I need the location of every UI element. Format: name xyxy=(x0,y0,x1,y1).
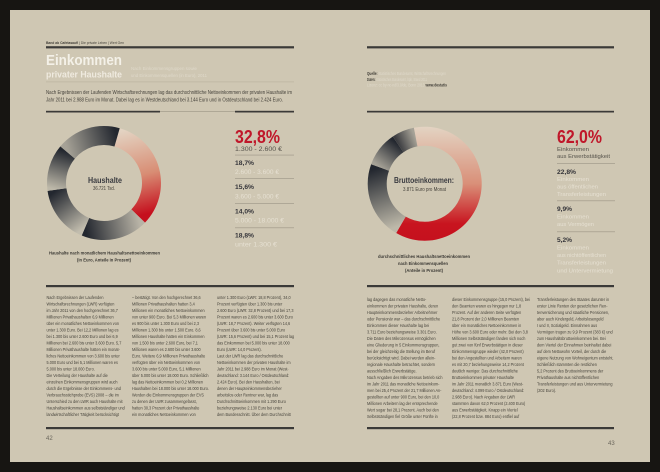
body text column 2: Millionen ein monatliches Nettoeinkommen xyxy=(132,308,205,313)
donut caption: (Anteile in Prozent) xyxy=(405,268,443,273)
segment 14,0% xyxy=(47,146,75,191)
body text column 6: Transferleistungen des Staates darunter in xyxy=(537,297,610,302)
body text column 6 xyxy=(537,297,613,393)
body text column 3: denen der Haupteinkommensbezieher xyxy=(217,386,282,391)
body text column 3: arbeitslos oder Rentner war, lag das xyxy=(217,392,278,398)
body text column 3: beziehungsweise 2.130 Euro bei unter xyxy=(217,405,283,411)
body text column 1: Haushaltseinkommen aus selbstständiger und xyxy=(46,405,125,411)
body text column 6: auf dem Nettowohn Vorteil, der durch die xyxy=(537,349,607,354)
stat 18,7%: 2.600 - 3.600 € xyxy=(235,169,279,176)
donut chart: Bruttoeinkommen xyxy=(368,127,482,241)
body text column 4: Einkommen dieser Haushalte lag bei xyxy=(367,323,429,328)
body text column 5: deutschland: 4.099 Euro / Ostdeutschland: xyxy=(452,388,524,393)
body text column 4: Millionen Arbeitern lag der entsprechende xyxy=(367,401,438,406)
body text column 6: erster Linie Renten der gesetzlichen Ren- xyxy=(537,303,608,309)
body text column 3: Prozent über 3.600 bis unter 5.000 Euro xyxy=(217,327,286,333)
page number 42: 42 xyxy=(46,436,53,442)
body text column 2: von 1.500 bis unter 2.600 Euro, bei 7,1 xyxy=(132,340,198,346)
donut centre label xyxy=(88,176,122,192)
body text column 5: im Jahr 2011 monatlich 3.871 Euro (West- xyxy=(452,381,524,387)
body text column 5: aus Erwerbstätigkeit. Knapp ein Viertel xyxy=(452,407,518,413)
body text column 4 xyxy=(367,297,443,419)
segment 5,2% xyxy=(393,128,417,152)
segment 32,8% xyxy=(114,128,161,223)
body text column 1: Unterschied zu den LWR auch Haushalte mit xyxy=(46,399,123,404)
stat 18,8% xyxy=(235,232,277,248)
donut caption xyxy=(49,250,160,262)
body text column 1: unter 1.300 Euro. Bei 12,2 Millionen lag es xyxy=(46,327,119,333)
title side note: und Einkommensquellen (in Euro), 2011 xyxy=(131,73,207,78)
body text column 4: men bei 25,4 Prozent der 21,7 Millionen An- xyxy=(367,388,442,393)
segment 18,7% xyxy=(82,209,145,240)
body text column 2: Millionen waren es 2.600 bis unter 3.600 xyxy=(132,347,201,352)
intro text: Nach Ergebnissen der Laufenden Wirtschaftsrechnungen lag das durchschnittliche Nettoeinkommen der privaten Haushalte im xyxy=(46,90,292,96)
body text column 3: Jahr 2011 bei 2.988 Euro im Monat (West- xyxy=(217,366,289,372)
body text column 2: Millionen 1.300 bis unter 1.500 Euro. 8,6 xyxy=(132,327,201,333)
donut centre label xyxy=(394,176,454,193)
body text column 4: einkommen der privaten Haushalte, deren xyxy=(367,303,439,309)
body text column 1: Millionen Privathaushalte hatten ein monat- xyxy=(46,347,120,352)
body text column 2: 3.600 bis unter 5.000 Euro, 5,1 Millionen xyxy=(132,366,201,372)
body text column 3: dem Bundesschnitt. Über dem Durchschnitt xyxy=(217,412,291,417)
body text column 5 xyxy=(452,297,530,419)
body text column 5: stammten davon 62,0 Prozent (2.400 Euro) xyxy=(452,401,526,406)
body text column 2: Werden die Einkommensgruppen der EVS xyxy=(132,392,204,398)
title side note xyxy=(131,66,207,78)
donut caption: durchschnittliches Haushaltsnettoeinkommen xyxy=(378,254,470,259)
stat 14,0%: 5.000 - 18.000 € xyxy=(235,218,284,224)
body text column 5: den Beamten waren es hingegen nur 1,8 xyxy=(452,303,522,309)
source note: Lizenz: cc by-nc-nd/3.0/de, Bonn 2013 www.destatis xyxy=(367,82,448,87)
body text column 2: hatten 30,3 Prozent der Privathaushalte xyxy=(132,405,200,411)
body text column 1: Wirtschaftsrechnungen (LWR) verfügten xyxy=(46,301,115,307)
body text column 5: dieser Einkommensgruppe (15,0 Prozent), bei xyxy=(452,297,530,302)
donut caption: (in Euro, Anteile in Prozent) xyxy=(77,258,131,262)
body text column 1: Die Verteilung der Haushalte auf die xyxy=(46,373,108,378)
body text column 1: Millionen Privathaushalten 6,9 Millionen xyxy=(46,314,114,320)
body text column 4: berücksichtigt wird. Dabei werden allein- xyxy=(367,355,436,361)
stat 62,0% xyxy=(557,127,610,160)
body text column 3: Nettoeinkommen der privaten Haushalte im xyxy=(217,360,291,365)
stat 9,9% xyxy=(557,206,594,228)
stat 5,2%: Einkommen xyxy=(557,246,589,252)
body text column 2: Haushalten bei 18.000 bis unter 18.000 Euro. xyxy=(132,386,209,391)
stat 18,7%: 18,7% xyxy=(235,160,254,167)
stat 14,0% xyxy=(235,208,284,224)
body text column 5: Einkommensgruppe wieder (42,0 Prozent) xyxy=(452,349,524,354)
body text column 2: es 900 bis unter 1.300 Euro und bei 2,3 xyxy=(132,321,199,326)
donut chart: Haushalte xyxy=(47,126,161,240)
donut caption: Haushalte nach monatlichem Haushaltsnettoeinkommen xyxy=(49,250,160,256)
donut centre label: 36.721 Tsd. xyxy=(93,186,115,192)
source note: Quelle: Statistisches Bundesamt, Wirtschaftsrechnungen xyxy=(367,71,446,76)
body text column 6: (202 Euro). xyxy=(537,388,556,393)
body text column 6: eigene Nutzung von Wohneigentum entsteht. xyxy=(537,355,613,361)
running header: Band ab Cafetasaufl | Die private Leben | Wert Gen xyxy=(46,41,124,45)
stat 62,0%: aus Erwerbstätigkeit xyxy=(557,154,610,160)
body text column 6: Vermögen trugen zu 9,9 Prozent (383 €) und xyxy=(537,329,613,335)
body text column 6: 5,2 Prozent des Bruttoeinkommens der xyxy=(537,368,604,374)
body text column 6: Schließlich stammten die restlichen xyxy=(537,362,597,367)
body text column 2: Euro. Weitere 6,9 Millionen Privathaushalte xyxy=(132,353,206,359)
body text column 3: Laut der LWR lag das durchschnittliche xyxy=(217,353,284,359)
segment 9,9% xyxy=(371,136,403,171)
stat 5,2%: Transferleistungen xyxy=(557,260,606,266)
body text column 3: Prozent waren es 2.600 bis unter 3.600 Euro xyxy=(217,314,293,320)
stat 9,9%: 9,9% xyxy=(557,206,572,213)
body text column 3: deutschland: 3.144 Euro / Ostdeutschland: xyxy=(217,373,289,378)
page number 43: 43 xyxy=(608,441,615,447)
body text column 4: regionale Haushalte betrachtet, sondern xyxy=(367,362,436,367)
body text column 4: im Jahr 2011 das monatliche Nettoeinkom- xyxy=(367,381,440,387)
heading: Einkommen xyxy=(46,52,122,69)
body text column 2: ein monatliches Nettoeinkommen von xyxy=(132,412,196,417)
body text column 5: Bruttoeinkommen privater Haushalte xyxy=(452,375,515,380)
body text column 2: über 5.000 bis unter 18.000 Euro. Schließlich xyxy=(132,373,209,378)
body text column 3: Euro (LWR: 14,0 Prozent). xyxy=(217,347,262,352)
body text column 4: Selbstständigen fiel Größe unter Fünfte in xyxy=(367,414,438,419)
donut centre label: Bruttoeinkommen: xyxy=(394,176,454,185)
body text column 1: im Jahr 2011 von den hochgerechnet 36,7 xyxy=(46,308,118,313)
body text column 2: lag das Nettoeinkommen bei 0,2 Millionen xyxy=(132,379,204,385)
body text column 5: (22,8 Prozent bzw. 884 Euro) entfiel auf xyxy=(452,414,520,419)
body text column 2: verfügten über ein Nettoeinkommen von xyxy=(132,360,201,365)
body text column 6: I und II, Sozialgeld. Einnahmen aus xyxy=(537,323,597,328)
source note: Daten: Statistisches Bundesamt, bpb, Stand 2011 xyxy=(367,77,427,82)
donut caption xyxy=(378,254,470,273)
title block xyxy=(46,52,122,80)
body text column 4: oder Pensionär war – das durchschnittliche xyxy=(367,316,441,322)
body text column 1: durch die Ergebnisse der Einkommens- und xyxy=(46,386,121,391)
body text column 4: Nach Angaben des Mikrozensus betrieb sich xyxy=(367,375,443,380)
body text column 3: Durchschnittseinkommen mit 1.290 Euro xyxy=(217,399,286,404)
body text column 4: eine Gliederung in 5 Einkommensgruppen, xyxy=(367,342,439,348)
stat 5,2% xyxy=(557,237,613,274)
segment 15,6% xyxy=(48,188,89,235)
body text column 6: aber auch Kindergeld, Arbeitslosengeld xyxy=(537,316,604,322)
stat 32,8%: 1.300 - 2.600 € xyxy=(235,146,282,153)
body text column 4: Haupteinkommensbezieher Arbeitnehmer xyxy=(367,310,438,315)
income bracket statistics xyxy=(235,127,294,248)
body text column 6: Transferleistungen und aus Untervermietung xyxy=(537,381,613,387)
body text column 1: 5.000 bis unter 18.000 Euro. xyxy=(46,366,95,372)
income source statistics xyxy=(557,127,615,274)
stat 18,8%: 18,8% xyxy=(235,232,254,240)
donut centre label: 3.871 Euro pro Monat xyxy=(403,187,447,193)
body text column 1: Nach Ergebnissen der Laufenden xyxy=(46,295,104,300)
body text column 5: Höhe von 3.600 Euro oder mehr. Bei den 3,8 xyxy=(452,329,528,335)
stat 5,2%: und Untervermietung xyxy=(557,268,613,274)
stat 22,8% xyxy=(557,169,606,198)
stat 22,8%: aus öffentlichen xyxy=(557,184,598,190)
stat 5,2%: aus nichtöffentlichen xyxy=(557,253,606,259)
body text column 2: Millionen Privathaushalten hatten 3,4 xyxy=(132,301,195,307)
body text column 3: unter 1.300 Euro (LWR: 18,8 Prozent), 34,0 xyxy=(217,295,291,300)
body text column 2 xyxy=(132,295,209,417)
body text column 6: dem Viertel der Einnahmen beinhaltet dabei xyxy=(537,342,611,348)
stat 18,7% xyxy=(235,160,279,176)
stat 62,0%: 62,0% xyxy=(557,127,602,147)
body text column 5: 2.988 Euro). Nach Angaben der LWR xyxy=(452,394,515,400)
stat 32,8%: 32,8% xyxy=(235,127,280,147)
body text column 3: 2.600 Euro (LWR: 32,8 Prozent) und bei 17,3 xyxy=(217,308,294,313)
segment 62,0% xyxy=(396,127,482,241)
body text column 3: Prozent verfügten über 1.300 bis unter xyxy=(217,301,283,307)
body text column 1: einzelnen Einkommensgruppen wird auch xyxy=(46,379,118,385)
body text column 3: (LWR: 18,7 Prozent). Weiter verfügten 14,6 xyxy=(217,321,291,326)
body text column 5: bei den Angestellten und Arbeitern waren xyxy=(452,355,522,361)
body text column 3: 2.424 Euro). Bei den Haushalten, bei xyxy=(217,379,280,385)
donut caption: nach Einkommensquellen xyxy=(398,261,448,266)
body text column 5: gut zwei von fünf Erwerbstätigen in dieser xyxy=(452,342,523,348)
source note xyxy=(367,71,448,87)
body text column 4: Die Daten des Mikrozensus ermöglichen xyxy=(367,336,436,341)
intro text xyxy=(46,90,292,104)
body text column 5: über ein monatliches Nettoeinkommen in xyxy=(452,323,522,328)
subheading: privater Haushalte xyxy=(46,70,122,80)
stat 5,2%: 5,2% xyxy=(557,237,572,244)
segment 22,8% xyxy=(368,164,406,233)
body text column 4: lag dagegen das monatliche Netto- xyxy=(367,297,427,302)
body text column 4: gestellten auf unter 900 Euro, bei den 10,0 xyxy=(367,394,440,400)
stat 15,6%: 15,6% xyxy=(235,184,254,191)
body text column 1 xyxy=(46,295,125,417)
stat 22,8%: Einkommen xyxy=(557,177,589,183)
body text column 1: 5.000 Euro und bei 5,1 Millionen waren es xyxy=(46,360,118,365)
body text column 5: Prozent. Auf der anderen Seite verfügten xyxy=(452,310,522,315)
title side note: Nach Einkommensgruppen sowie xyxy=(131,66,197,71)
body text column 1: landwirtschaftlicher Tätigkeit berücksichtigt xyxy=(46,412,120,417)
body text column 5: 21,8 Prozent der 2,0 Millionen Beamten xyxy=(452,316,520,322)
stat 18,8%: unter 1.300 € xyxy=(235,242,277,248)
body text column 4: bei der gleichzeitig die Stellung im Beruf xyxy=(367,349,436,354)
body text column 1: Millionen bei 2.600 bis unter 3.600 Euro. 5,7 xyxy=(46,340,122,346)
body text column 6: zum Haushaltsbruttoeinkommen bei. Bei xyxy=(537,336,606,341)
body text column 6: tenversicherung und staatliche Pensionen, xyxy=(537,310,609,315)
body text column 5: Millionen Selbstständigen fanden sich noch xyxy=(452,336,526,341)
body text column 3: (LWR: 15,6 Prozent) und bei 15,1 Prozent lag xyxy=(217,334,295,339)
stat 22,8%: Transferleistungen xyxy=(557,192,606,198)
intro text: Jahr 2011 bei 2.988 Euro im Monat. Dabei lag es in Westdeutschland bei 3.144 Euro und in Ostdeutschland bei 2.424 Euro. xyxy=(46,98,283,104)
stat 9,9%: Einkommen xyxy=(557,214,589,220)
donut centre label: Haushalte xyxy=(88,176,122,185)
body text column 1: liches Nettoeinkommen von 3.600 bis unter xyxy=(46,353,120,359)
body text column 6: Privathaushalte aus nichtöffentlichen xyxy=(537,375,600,380)
body text column 2: zu denen der LWR zusammengefasst, xyxy=(132,399,197,404)
stat 9,9%: aus Vermögen xyxy=(557,222,594,228)
stat 15,6%: 3.600 - 5.000 € xyxy=(235,194,279,200)
body text column 2: von unter 900 Euro. Bei 5,3 Millionen waren xyxy=(132,314,207,320)
segment 18,8% xyxy=(60,126,120,159)
stat 62,0%: Einkommen xyxy=(557,147,589,153)
body text column 4: 3.711 Euro beziehungsweise 3.301 Euro. xyxy=(367,329,437,335)
body text column 4: Wert sogar bei 28,1 Prozent. Auch bei den xyxy=(367,407,439,413)
body text column 3 xyxy=(217,295,295,417)
body text column 5: es mit 20,7 beziehungsweise 14,2 Prozent xyxy=(452,362,525,367)
body text column 4: ausschließlich Erwerbstätige. xyxy=(367,368,417,374)
body text column 1: Verbrauchsstichprobe (EVS) 2008 – die im xyxy=(46,392,119,398)
body text column 1: über ein monatliches Nettoeinkommen von xyxy=(46,321,120,326)
body text column 1: bei 1.300 bis unter 2.600 Euro und bei 6,9 xyxy=(46,334,118,339)
stat 15,6% xyxy=(235,184,279,200)
body text column 3: das Einkommen bei 5.000 bis unter 18.000 xyxy=(217,340,290,346)
body text column 5: deutlich weniger. Das durchschnittliche xyxy=(452,368,518,374)
body text column 2: – bestätigt. Von den hochgerechnet 36,6 xyxy=(132,295,201,300)
stat 22,8%: 22,8% xyxy=(557,169,576,176)
stat 14,0%: 14,0% xyxy=(235,208,254,216)
body text column 2: Millionen Haushalte hatten ein Einkommen xyxy=(132,334,205,339)
